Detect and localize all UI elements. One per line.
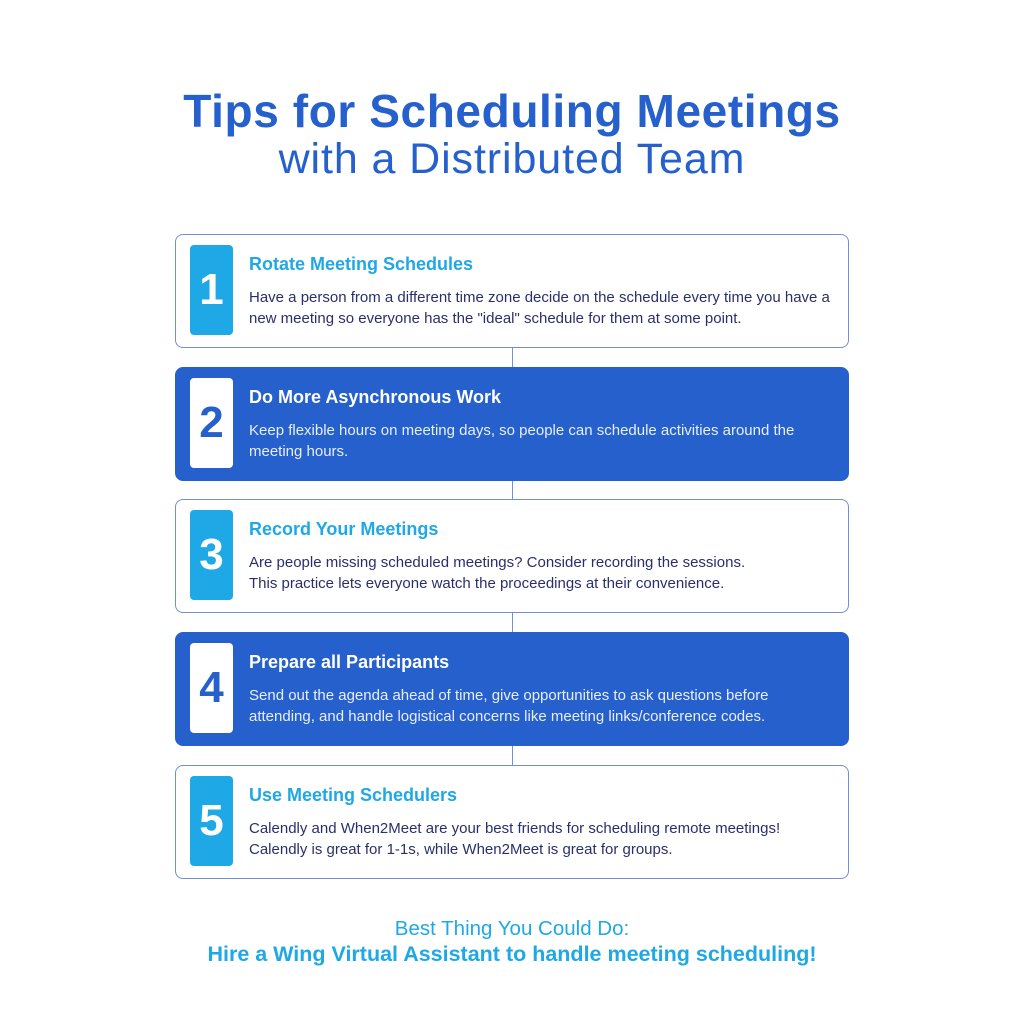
text 1: Have a person from a different time zone decide on the schedule every time you have a — [249, 289, 830, 306]
number 3 — [190, 510, 233, 600]
footer line 2: Hire a Wing Virtual Assistant to handle meeting scheduling! — [207, 942, 817, 966]
panel: tip 2 — [175, 367, 849, 481]
number 4 — [190, 643, 233, 733]
heading 2: Do More Asynchronous Work — [249, 387, 501, 407]
text 3: This practice lets everyone watch the proceedings at their convenience. — [249, 575, 724, 592]
text 2: Keep flexible hours on meeting days, so people can schedule activities around the — [249, 422, 794, 439]
number 2 — [190, 378, 233, 468]
text 3 — [249, 554, 745, 592]
number 5 — [190, 776, 233, 866]
number 3: 3 — [199, 530, 224, 579]
text 5 — [249, 820, 780, 858]
heading 1: Rotate Meeting Schedules — [249, 254, 473, 274]
text 1: new meeting so everyone has the "ideal" schedule for them at some point. — [249, 310, 742, 327]
title: Tips for Scheduling Meetings — [183, 85, 841, 137]
panel: tip 4 — [175, 632, 849, 746]
text 1 — [249, 289, 830, 327]
panel: tip 5 — [175, 765, 849, 879]
heading 3: Record Your Meetings — [249, 519, 438, 539]
number 4: 4 — [199, 663, 224, 712]
number 5: 5 — [199, 796, 224, 845]
text 2 — [249, 422, 794, 460]
footer line 1: Best Thing You Could Do: — [395, 917, 629, 940]
heading 4: Prepare all Participants — [249, 652, 449, 672]
text 5: Calendly is great for 1-1s, while When2Meet is great for groups. — [249, 841, 673, 858]
heading 5: Use Meeting Schedulers — [249, 785, 457, 805]
number 2: 2 — [199, 398, 224, 447]
text 5: Calendly and When2Meet are your best friends for scheduling remote meetings! — [249, 820, 780, 837]
text 2: meeting hours. — [249, 443, 348, 460]
text 3: Are people missing scheduled meetings? Consider recording the sessions. — [249, 554, 745, 571]
panel: tip 1 — [175, 234, 849, 348]
text 4: attending, and handle logistical concerns like meeting links/conference codes. — [249, 708, 765, 725]
number 1: 1 — [199, 265, 224, 314]
number 1 — [190, 245, 233, 335]
text 4: Send out the agenda ahead of time, give opportunities to ask questions before — [249, 687, 769, 704]
text 4 — [249, 687, 769, 725]
panel: tip 3 — [175, 499, 849, 613]
subtitle: with a Distributed Team — [279, 135, 745, 183]
connector line — [512, 348, 513, 766]
